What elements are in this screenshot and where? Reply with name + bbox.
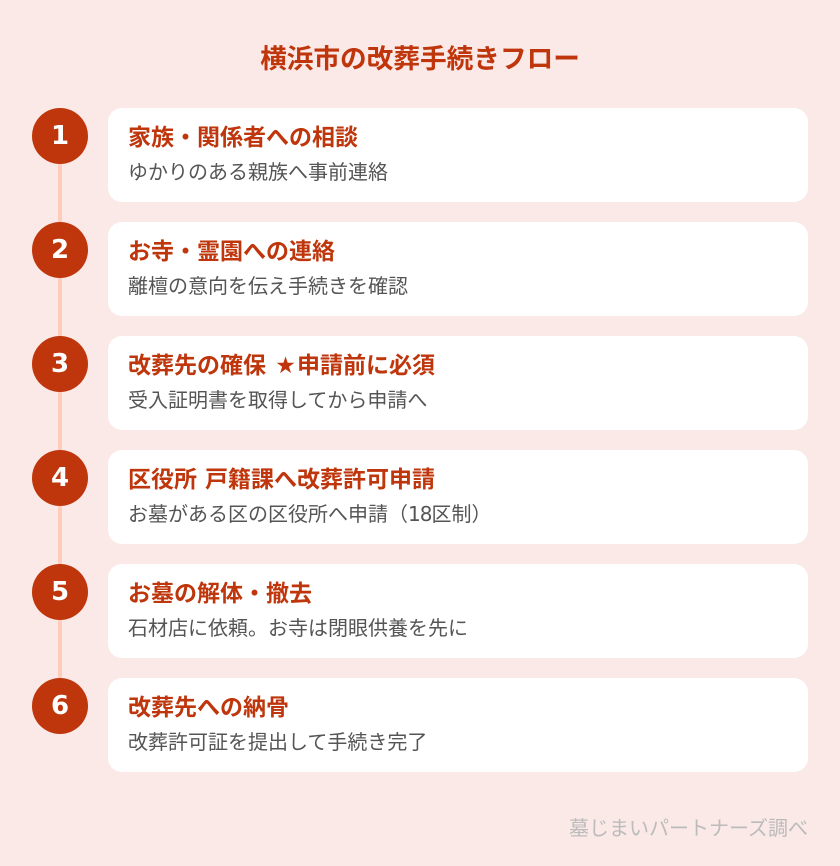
panel: step 6	[108, 678, 808, 772]
step 6 number	[32, 678, 88, 734]
step 1 heading: 家族・関係者への相談	[128, 125, 358, 151]
step 3 text: 受入証明書を取得してから申請へ	[128, 388, 427, 412]
step 1 number: 1	[51, 121, 69, 151]
step 5 number	[32, 564, 88, 620]
connector line 4-5	[58, 506, 62, 600]
panel: step 3	[108, 336, 808, 430]
step 4 heading: 区役所 戸籍課へ改葬許可申請	[128, 467, 435, 493]
step 4 number: 4	[51, 463, 69, 493]
title: 横浜市の改葬手続きフロー	[260, 44, 580, 75]
step 5 number: 5	[51, 577, 69, 607]
step 2 number	[32, 222, 88, 278]
step 2 number: 2	[51, 235, 69, 265]
step 1 text: ゆかりのある親族へ事前連絡	[128, 160, 388, 184]
step 3 number	[32, 336, 88, 392]
source note: 墓じまいパートナーズ調べ	[569, 816, 808, 840]
step 6 text: 改葬許可証を提出して手続き完了	[128, 730, 427, 754]
step 4 number	[32, 450, 88, 506]
step 3 number: 3	[51, 349, 69, 379]
step 6 number: 6	[51, 691, 69, 721]
panel: step 4	[108, 450, 808, 544]
step 2 text: 離檀の意向を伝え手続きを確認	[128, 274, 408, 298]
step 4 text: お墓がある区の区役所へ申請（18区制）	[128, 502, 491, 526]
connector line 3-4	[58, 392, 62, 486]
connector line 5-6	[58, 620, 62, 714]
step 3 heading: 改葬先の確保 申請前に必須	[128, 353, 435, 379]
panel: step 2	[108, 222, 808, 316]
connector line 1-2	[58, 164, 62, 258]
step 5 text: 石材店に依頼。お寺は閉眼供養を先に	[128, 616, 468, 640]
step 6 heading: 改葬先への納骨	[128, 695, 289, 721]
step 2 heading: お寺・霊園への連絡	[128, 239, 335, 265]
step 1 number	[32, 108, 88, 164]
connector line 2-3	[58, 278, 62, 372]
step 3 heading: ★	[275, 353, 296, 379]
panel: step 5	[108, 564, 808, 658]
step 5 heading: お墓の解体・撤去	[128, 581, 312, 607]
panel: step 1	[108, 108, 808, 202]
